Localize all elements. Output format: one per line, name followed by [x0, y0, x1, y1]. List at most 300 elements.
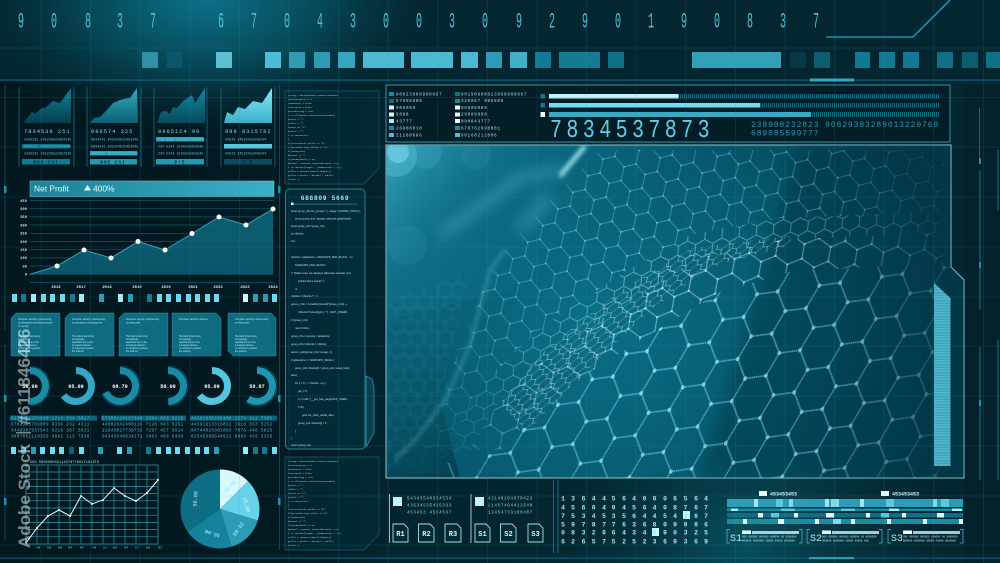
- code main text: group_info = kmalloc(sizeof(*group_info) +: [291, 302, 348, 306]
- KPI labels: P/E: [243, 160, 253, 166]
- profit points: [54, 206, 276, 268]
- hexagon mesh near fold upper: [441, 212, 945, 464]
- code upper text: currentContext = 0: [288, 98, 312, 101]
- donut 5: [196, 370, 228, 402]
- KPI numbers: 7834538 251: [24, 129, 71, 135]
- pie chart: [180, 469, 259, 549]
- code upper text: prefix = "";: [288, 130, 304, 133]
- status codes left: 29089898: [461, 114, 488, 118]
- code main text: group_info->blocks[0] = group_info->small_block;: [295, 366, 350, 370]
- code main text: nblocks = (gidsetsize + NGROUPS_PER_BLOCK - 1) /: [291, 255, 353, 259]
- x axis labels: 2020: [161, 286, 171, 290]
- code main text: for (i = 0; i < nblocks; i++) {: [295, 381, 326, 385]
- code lower text: parsedString = true: [288, 476, 314, 479]
- code main text: if (!b): [298, 405, 304, 409]
- KPI small rows: 9934241 345234523452345: [91, 144, 138, 148]
- KPI small rows: 234 5234 5234523452345: [158, 152, 203, 156]
- code main text: struct group_info init_groups = { .usage = ATOMIC_INIT(2) };: [291, 209, 361, 213]
- code upper text: if(parsedString) suffix += "$";: [288, 146, 329, 149]
- file codes: 54343540334534: [407, 498, 452, 502]
- profit line: [30, 209, 273, 274]
- file codes: 453453 4534537: [407, 512, 452, 516]
- code upper text: return s;: [288, 178, 300, 181]
- code lower text: string = oAttachToken::ConvertToTokens: [288, 460, 339, 463]
- panel: line chart: [26, 461, 163, 550]
- status codes left: 21280666: [396, 134, 423, 138]
- code lower text: suffix = "";: [288, 488, 304, 491]
- text cards copy: increasingly: [72, 338, 85, 341]
- text cards copy: on computer systems,: [126, 347, 149, 350]
- code lower text: prefix = "";: [288, 484, 304, 487]
- file icon shapes: [393, 524, 543, 542]
- status codes left: 908908: [396, 107, 416, 111]
- code main text: struct group_info *groups_alloc(int gidsetsize){: [295, 216, 351, 220]
- code lower text: currentContext = 0: [288, 464, 312, 467]
- KPI frame lines: [19, 87, 275, 167]
- code upper text: s += contextVal: [288, 134, 308, 137]
- text cards copy: significant due to the: [235, 341, 257, 344]
- KPI small rows: 34523 34523452345234: [225, 138, 266, 142]
- code upper text: prefix = prefix + decimal + suffix;: [288, 174, 334, 177]
- code main text: nblocks*sizeof(gid_t *), GFP_USER);: [298, 310, 348, 314]
- line chart month labels: AUG: [113, 546, 118, 550]
- text cards copy: or information technology security: [18, 322, 53, 324]
- matrix digits: 456049456408767: [561, 504, 708, 512]
- file codes: [407, 498, 533, 516]
- status frame: [386, 85, 950, 142]
- code lower text: return s;: [288, 544, 300, 547]
- pie labels: 10.00: [223, 480, 238, 495]
- square indicator row lower: [11, 447, 277, 454]
- y axis labels: 150: [20, 249, 28, 253]
- donut 5: 65.00: [204, 384, 220, 390]
- line chart month labels: DEC: [158, 546, 163, 550]
- panel: code block upper: [285, 91, 379, 184]
- KPI small rows: 2345231 345234523452345: [24, 144, 71, 148]
- text cards copy: increased reliance: [72, 344, 91, 347]
- y axis labels: 50: [22, 265, 28, 269]
- text cards copy: or infosecurity: [126, 322, 141, 324]
- code upper text: [288, 94, 342, 181]
- status codes left: 26908010: [396, 127, 423, 131]
- file codes: 43534535435333: [407, 504, 452, 508]
- profit area: [30, 209, 273, 274]
- bokeh lights: [386, 145, 487, 264]
- KPI small rows: 34523 34523452345234: [225, 152, 266, 156]
- code main text: b = (void *)__get_free_page(GFP_USER);: [298, 397, 348, 401]
- line chart grid: [26, 465, 158, 544]
- table numbers: 3449397937643 6216 367 5921: [11, 430, 90, 434]
- line chart month labels: JAN: [36, 546, 41, 550]
- panel: digit matrix: [554, 480, 708, 553]
- file icon labels: R2: [422, 531, 431, 539]
- y axis labels: 100: [20, 257, 28, 261]
- KPI small rows: 2345231 345234523452345: [24, 138, 71, 142]
- file codes: 12454733100407: [488, 512, 533, 516]
- x axis labels: 2021: [188, 286, 198, 290]
- donut 1: [10, 366, 50, 406]
- x axis labels: 2022: [213, 286, 223, 290]
- code main header: 686809 5669: [301, 195, 349, 202]
- matrix highlights: [652, 511, 690, 536]
- code main text: }: [291, 436, 292, 440]
- x axis labels: 2018: [102, 286, 112, 290]
- matrix dividers: [554, 480, 558, 553]
- matrix digits: 083266434690325: [561, 530, 708, 536]
- chart: fourth KPI: [224, 88, 272, 123]
- line chart month labels: APR: [68, 546, 73, 550]
- chart: ROA: [23, 88, 71, 123]
- status codes left: 67996809: [396, 100, 423, 104]
- code main text: /* Make sure we always allocate at least one: [291, 271, 352, 275]
- code main text: if (!group_info): [291, 318, 308, 322]
- file icon labels: S1: [478, 531, 487, 539]
- table numbers: [11, 418, 273, 440]
- code lower frame: [285, 457, 379, 550]
- x axis labels: 2019: [132, 286, 142, 290]
- KPI numbers: 998 8315782: [225, 129, 272, 135]
- barcode S blocks: S3: [891, 534, 903, 545]
- panel: code block main: [286, 189, 365, 449]
- text cards copy: significant due to the: [126, 341, 148, 344]
- status codes left: 90823898908667: [396, 94, 442, 98]
- code main text: [291, 209, 361, 447]
- net profit header: 400%: [93, 184, 115, 194]
- text cards copy: the Internet: [126, 350, 138, 353]
- table highlight bars: [10, 416, 277, 421]
- y axis labels: 200: [20, 241, 28, 245]
- text cards copy: the Internet: [72, 350, 84, 353]
- y axis labels: 300: [20, 224, 28, 228]
- pie labels: [192, 480, 251, 538]
- code lower text: decimal += "";: [288, 520, 306, 523]
- square indicator row upper: [12, 294, 277, 302]
- KPI small rows: [24, 138, 266, 156]
- text cards copy: the Internet: [235, 350, 247, 353]
- status codes left: [396, 94, 527, 138]
- y axis labels: 450: [20, 200, 28, 204]
- donut 2: 65.00: [68, 384, 84, 390]
- pie labels: 35.00: [204, 528, 221, 538]
- x axis labels: [51, 286, 278, 290]
- text cards copy: The field is becoming: [235, 336, 257, 338]
- code upper text: s += allContext.charAt(contextIndex): [288, 114, 335, 117]
- file icon labels: [396, 531, 540, 539]
- code upper text: runContext = false: [288, 102, 312, 105]
- text cards copy: or information technology sec.: [72, 322, 103, 324]
- file icon labels: S2: [504, 531, 513, 539]
- code lower text: suffix = content.substr(length-1): [288, 536, 331, 539]
- table numbers: 6782335709009 9336 232 4311: [11, 424, 90, 428]
- hexagon mesh fold: [502, 236, 790, 430]
- left shade: [387, 317, 460, 477]
- code upper text: if(startsWith) prefix += "$";: [288, 142, 326, 145]
- code lower text: prefix = prefix + decimal + suffix;: [288, 540, 334, 543]
- side tab: [366, 376, 374, 447]
- text cards copy: on computer systems,: [72, 347, 95, 350]
- panel: top status block: [386, 85, 950, 145]
- KPI numbers: 998574 325: [91, 129, 133, 135]
- x axis labels: 2023: [240, 286, 250, 290]
- code upper text: s += content(length - (numDecimals + 1));: [288, 166, 342, 169]
- code upper text: prefix = "";: [288, 118, 304, 121]
- pie slice 50: [180, 469, 220, 532]
- code main text: NGROUPS_PER_BLOCK;: [295, 263, 326, 267]
- donut 4: 50.00: [160, 384, 176, 390]
- matrix digits: 626575252369369: [561, 538, 708, 546]
- line chart month labels: FEB: [47, 546, 52, 550]
- text cards shapes: [11, 313, 276, 356]
- hexagon mesh near fold lower: [472, 232, 945, 450]
- status bar squares: [540, 94, 545, 117]
- file codes: 21457464412540: [488, 504, 533, 508]
- code lower text: s += allContext.charAt(contextIndex): [288, 480, 335, 483]
- status codes left: 90160212806: [461, 134, 497, 138]
- chart: ROE: [90, 88, 138, 123]
- hexagon mesh upper: [410, 150, 945, 465]
- text cards copy: increased reliance: [126, 344, 145, 347]
- code upper text: parsedString = true: [288, 110, 314, 113]
- code lower text: charAt == "1";: [288, 492, 306, 495]
- status codes left: 86909089: [461, 107, 488, 111]
- text cards copy: increasingly: [235, 338, 248, 341]
- KPI labels: [22, 159, 272, 166]
- text cards copy: the Internet: [18, 350, 30, 353]
- KPI small rows: 234 5234 5234523452345: [158, 138, 203, 142]
- status codes right: [751, 121, 939, 138]
- barcode rows: [727, 499, 963, 524]
- code lower text: if(parsedString) suffix += "$";: [288, 512, 329, 515]
- code lower text: runContext = false: [288, 468, 312, 471]
- code upper text: suffix = "";: [288, 122, 304, 125]
- mesh left edge glow: [395, 250, 505, 460]
- pie labels: 25.00: [241, 496, 251, 513]
- code upper text: string = oAttachToken::ConvertToTokens: [288, 94, 339, 97]
- panel: bottom file icons: [390, 494, 543, 543]
- line chart month labels: JUL: [103, 546, 108, 550]
- code lower text: decimal = content.insert(decimals + 5);: [288, 528, 339, 531]
- panel: net profit chart: [20, 181, 278, 290]
- table numbers: 44291830266408 2574 912 7305: [191, 418, 273, 422]
- text cards copy: on computer systems,: [179, 347, 202, 350]
- code main frame: [286, 189, 365, 449]
- vertical stock caption: [14, 328, 34, 548]
- code main text: atomic_set(&group_info->usage, 1);: [291, 350, 333, 354]
- panel: donut gauges: [10, 366, 277, 406]
- KPI numbers: [24, 129, 272, 135]
- donut 1: 50.00: [22, 384, 38, 390]
- text cards copy: on computer systems,: [18, 347, 41, 350]
- barcode S blocks: S1: [730, 534, 742, 545]
- pie labels: 50.00: [192, 491, 200, 507]
- text cards copy: The field is becoming: [179, 336, 201, 338]
- code main text: nblocks = nblocks ? : 1;: [291, 294, 318, 298]
- table numbers: 21643027738732 7297 457 5914: [102, 430, 184, 434]
- text cards copy: increasingly: [179, 338, 192, 341]
- KPI labels: P/E: [175, 160, 185, 166]
- status progress bars: [549, 94, 940, 117]
- file divider lines: [390, 494, 471, 543]
- top divider line: [0, 78, 1000, 82]
- code upper text: }: [288, 138, 290, 141]
- panel: KPI mini charts: [19, 87, 275, 167]
- soft left light: [387, 146, 598, 320]
- code lower text: if(startsWith) prefix += "$";: [288, 508, 326, 511]
- hexagon mesh lower: [446, 262, 950, 478]
- status codes left: 9898: [396, 114, 409, 118]
- status codes left: 090843777: [461, 120, 491, 124]
- panel: text cards: [11, 313, 276, 356]
- status codes left: 320867 996809: [461, 100, 504, 104]
- net profit header: Net Profit: [34, 184, 70, 194]
- matrix digits: 597877636809986: [561, 522, 708, 528]
- text cards copy: The field is becoming: [126, 336, 148, 338]
- pie slice 20: [220, 509, 258, 547]
- KPI labels: ROE (%): [100, 160, 126, 166]
- file icon labels: S3: [531, 531, 540, 539]
- right side rails: [979, 108, 998, 480]
- KPI numbers: 9985124 99: [158, 129, 200, 135]
- code upper text: if(tokensLen): [288, 150, 305, 153]
- text cards copy: increasingly: [18, 338, 31, 341]
- KPI small rows: 234 5234 5234523452345: [158, 144, 203, 148]
- file icon labels: R3: [449, 531, 457, 539]
- barcode S blocks: 000000 0000000 00000 00000 0000000: [903, 540, 956, 542]
- text cards copy: the Internet: [179, 350, 191, 353]
- main panel background: [386, 145, 964, 478]
- text cards copy: increasingly: [126, 338, 139, 341]
- table numbers: 44602942400119 7126 043 5251: [102, 424, 184, 428]
- code upper text: suffix = content.substr(length-1): [288, 170, 331, 173]
- text cards copy: increased reliance: [179, 344, 198, 347]
- status codes right: 689085599777: [751, 130, 819, 138]
- code main text: gid_t *b;: [298, 389, 308, 393]
- barcode S blocks: 000 000000 000000 000000 00 0000000: [742, 536, 797, 538]
- barcode label tags: 453453453: [892, 492, 919, 498]
- code main text: int nblocks;: [291, 232, 304, 236]
- barcode S blocks: 000000 0000000 00000 00000 000: [822, 540, 869, 542]
- pie labels: 20.00: [231, 520, 245, 537]
- right shade: [700, 146, 963, 477]
- donut 3: 68.70: [112, 384, 128, 390]
- panel: code block lower: [285, 457, 379, 550]
- barcode label tags: [759, 491, 919, 498]
- text cards copy: significant due to the: [72, 341, 94, 344]
- barcode S blocks: [727, 530, 963, 545]
- status codes left: 90190890823898908667: [461, 94, 527, 98]
- code main text: goto out_undo_partial_alloc;: [302, 413, 335, 417]
- y axis labels: [20, 200, 28, 278]
- KPI labels: ROA (%): [33, 160, 59, 166]
- text cards copy: The field is becoming: [72, 336, 94, 338]
- x axis labels: 2024: [268, 286, 278, 290]
- barcode label tags: 453453453: [770, 492, 797, 498]
- light streaks: [440, 146, 585, 235]
- line chart month labels: OCT: [135, 546, 140, 550]
- code main text: nt: [295, 287, 297, 291]
- code main text: }: [295, 429, 296, 433]
- y axis labels: 250: [20, 233, 28, 237]
- table numbers: 62545368544913 5093 462 3326: [191, 436, 273, 440]
- text cards copy: significant due to the: [179, 341, 201, 344]
- line chart header: 589 5606085861110707780171816T6: [30, 461, 99, 465]
- code lower text: if(tokensLen): [288, 516, 305, 519]
- text cards copy: increased reliance: [235, 344, 254, 347]
- text cards copy: increased reliance: [18, 344, 37, 347]
- code main text: group_info->blocks[i] = b;: [298, 421, 327, 425]
- code main text: int i;: [291, 239, 296, 243]
- KPI row highlights: [22, 137, 272, 156]
- donut 6: 59.87: [249, 384, 265, 390]
- text cards copy: [18, 318, 269, 353]
- net profit header: [30, 181, 274, 196]
- file codes: 42140104870423: [488, 498, 533, 502]
- panel: main visual: [375, 135, 964, 478]
- barcode S blocks: 000 000000 000000 000000 00 0000000: [822, 536, 877, 538]
- status codes left: 43777: [396, 120, 413, 124]
- status squares left: [389, 92, 460, 137]
- line chart month labels: SEP: [124, 546, 129, 550]
- y axis labels: 400: [20, 208, 28, 212]
- barcode S blocks: 000000 0000000 00000 00000 0000000: [742, 540, 795, 542]
- table numbers: 04744026381083 7076 448 5813: [191, 430, 273, 434]
- line chart month labels: MAY: [80, 546, 85, 550]
- table numbers: 6823412280840 1714 034 5027: [11, 418, 90, 422]
- line chart month labels: MAR: [58, 546, 63, 550]
- code upper text: charAt == "1";: [288, 126, 306, 129]
- x axis labels: 2017: [76, 286, 86, 290]
- profit grid lines: [30, 200, 274, 282]
- x axis labels: 2016: [51, 286, 61, 290]
- text cards copy: or security: [18, 325, 29, 328]
- code lower text: s += contextVal: [288, 500, 308, 503]
- text cards copy: significant due to the: [18, 341, 40, 344]
- line chart month labels: NOV: [146, 546, 151, 550]
- barcode S blocks: 000 000000 000000 000000 00 0000000: [903, 536, 958, 538]
- code lower text: [288, 460, 342, 547]
- table numbers: 3907061110326 4962 113 7530: [11, 436, 90, 440]
- pie slice 25: [220, 481, 259, 520]
- bottom divider line: [0, 557, 1000, 559]
- code lower text: startsWith = false: [288, 472, 312, 475]
- matrix digits: 753453564454367: [561, 513, 708, 520]
- text cards copy: Computer security, cybersecurity,: [72, 318, 106, 321]
- code upper frame: [285, 91, 379, 184]
- line chart month labels: [36, 546, 163, 550]
- pie slice 10: [220, 470, 248, 509]
- text cards copy: Computer security, cybersec.: [179, 318, 209, 321]
- status codes left: 678782690801: [461, 127, 501, 131]
- text cards copy: Computer security, cybersecurity,: [18, 318, 52, 321]
- vertical stock caption: #611846426: [14, 328, 34, 425]
- table numbers: 67399110107840 2594 033 6216: [102, 418, 184, 422]
- KPI small rows: 9934241 345234523452345: [91, 152, 138, 156]
- file icon labels: R1: [396, 531, 405, 539]
- pie slice 35: [188, 509, 232, 549]
- code main text: group_info->nblocks = nblocks;: [291, 342, 327, 346]
- big number: 7834537873: [550, 116, 714, 145]
- file squares: [393, 497, 484, 506]
- vertical stock caption: Adobe Stock: [15, 444, 34, 548]
- KPI small rows: 34523 34523452345234: [225, 144, 266, 148]
- text cards copy: Computer security, cybersecurity,: [235, 318, 269, 321]
- code lower text: s += content(length - (numDecimals + 1));: [288, 532, 342, 535]
- text cards copy: Computer security, cybersecurity,: [126, 318, 160, 321]
- code upper text: decimal = content.insert(decimals + 5);: [288, 162, 339, 165]
- text cards copy: on computer systems,: [235, 347, 258, 350]
- KPI small rows: 9934241 345234523452345: [91, 138, 138, 142]
- number table: [10, 416, 277, 440]
